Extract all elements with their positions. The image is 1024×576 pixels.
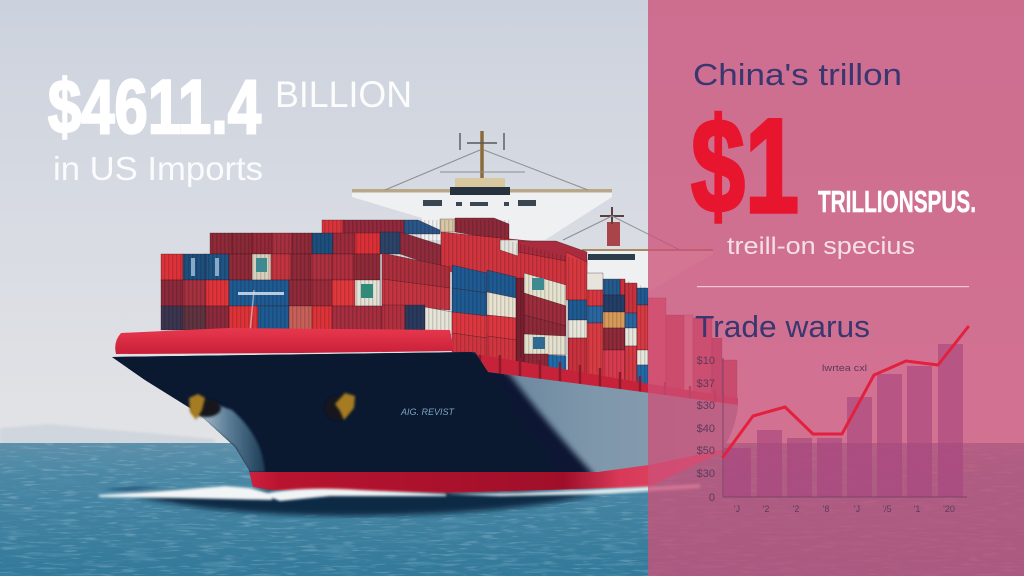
deck rim (115, 328, 454, 354)
x axis labels: '8 (823, 504, 829, 514)
hull side (440, 350, 750, 500)
chart annotation: lwrtea cxl (822, 363, 867, 373)
ship (100, 131, 750, 500)
hull bow highlight (190, 402, 265, 472)
x axis labels: 'J (854, 504, 860, 514)
caption: treill-on specius (727, 233, 915, 260)
big figure: $1 (691, 92, 799, 241)
unit label: BILLION (275, 74, 412, 115)
x axis labels: '2 (763, 504, 769, 514)
axes (723, 358, 967, 497)
row A (161, 254, 380, 280)
anchor left (189, 394, 221, 420)
hull dark bow (100, 350, 595, 495)
headline: billion figure: $4611.4 (48, 65, 261, 150)
hull (100, 350, 750, 500)
container stacks (161, 218, 737, 404)
blue stack (452, 265, 524, 362)
top tier containers (210, 218, 509, 268)
background sky (0, 0, 1024, 446)
container corrugation (161, 220, 648, 386)
combo chart (697, 327, 968, 514)
x axis labels (734, 504, 955, 514)
x axis labels: '20 (943, 504, 955, 514)
y axis labels: 0 (709, 492, 715, 504)
sea (0, 443, 1024, 576)
main bridge superstructure (352, 131, 612, 240)
y axis labels: $10 (697, 355, 715, 367)
y axis labels (697, 355, 715, 504)
row C (161, 306, 382, 330)
y axis labels: $30 (697, 468, 715, 480)
distant hills (0, 424, 215, 444)
anchor right (325, 393, 355, 420)
chart heading: Trade warus (695, 309, 870, 344)
subheading: US imports: in US Imports (53, 150, 263, 187)
hull dark bow core (112, 352, 488, 472)
x axis labels: '1 (914, 504, 920, 514)
red boot top (250, 450, 722, 493)
x axis labels: '2 (793, 504, 799, 514)
stern stacks (566, 252, 737, 404)
cream and maroon stack (524, 273, 566, 370)
y axis labels: $40 (697, 423, 715, 435)
hull name: AIG. REVIST (400, 407, 456, 417)
rear superstructure (563, 207, 713, 292)
background red blocks (441, 232, 587, 300)
y axis labels: $30 (697, 400, 715, 412)
trend line (723, 327, 968, 457)
x axis labels: 'J (734, 504, 740, 514)
x axis labels: '/5 (882, 504, 892, 514)
divider (697, 286, 969, 287)
panel: right pink overlay (648, 0, 1024, 576)
y axis labels: $50 (697, 445, 715, 457)
panel heading: China's trillon: China's trillon (693, 57, 902, 92)
row B (161, 280, 380, 306)
bow wake (98, 484, 700, 501)
y axis labels: $37 (697, 378, 715, 390)
lashing bridge (453, 350, 738, 407)
middle section (382, 253, 452, 335)
container logos (191, 258, 545, 349)
bars (724, 344, 963, 497)
